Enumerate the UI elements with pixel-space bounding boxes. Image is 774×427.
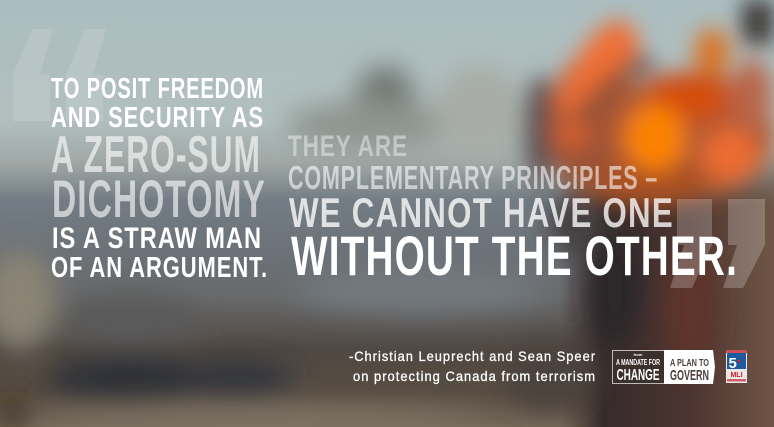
opening quotation mark — [13, 29, 106, 121]
distant haze and ground tones — [0, 65, 716, 427]
quote: right column — [288, 130, 738, 287]
logo: a mandate for change, a plan to govern: CHANGE — [616, 367, 660, 384]
attribution — [349, 348, 596, 384]
quote: left column: DICHOTOMY — [52, 170, 266, 229]
quote: left column: IS A STRAW MAN — [52, 222, 262, 255]
quote: left column: OF AN ARGUMENT. — [51, 252, 268, 284]
logo: a mandate for change, a plan to govern: A PLAN TO — [670, 358, 709, 369]
logo: a mandate for change, a plan to govern: GOVERN — [670, 367, 709, 384]
logo: a mandate for change, a plan to govern — [612, 350, 715, 384]
quote: left column: TO POSIT FREEDOM — [51, 73, 264, 105]
quote: left column: AND SECURITY AS — [51, 102, 264, 134]
closing quotation mark — [670, 199, 765, 288]
logo: a mandate for change, a plan to govern: from — [634, 352, 643, 357]
logo: MLI 5th anniversary: 5 — [728, 355, 737, 372]
quote: left column: A ZERO-SUM — [51, 126, 261, 184]
attribution: on protecting Canada from terrorism — [353, 368, 596, 384]
attribution: -Christian Leuprecht and Sean Speer — [349, 348, 596, 364]
logo: MLI 5th anniversary — [726, 350, 747, 383]
logo: MLI 5th anniversary: MLI — [730, 372, 743, 379]
logo: a mandate for change, a plan to govern: A MANDATE FOR — [616, 358, 660, 367]
quote: right column: THEY ARE — [288, 130, 408, 163]
fire and smoke — [524, 0, 774, 207]
quote: left column — [51, 73, 268, 284]
